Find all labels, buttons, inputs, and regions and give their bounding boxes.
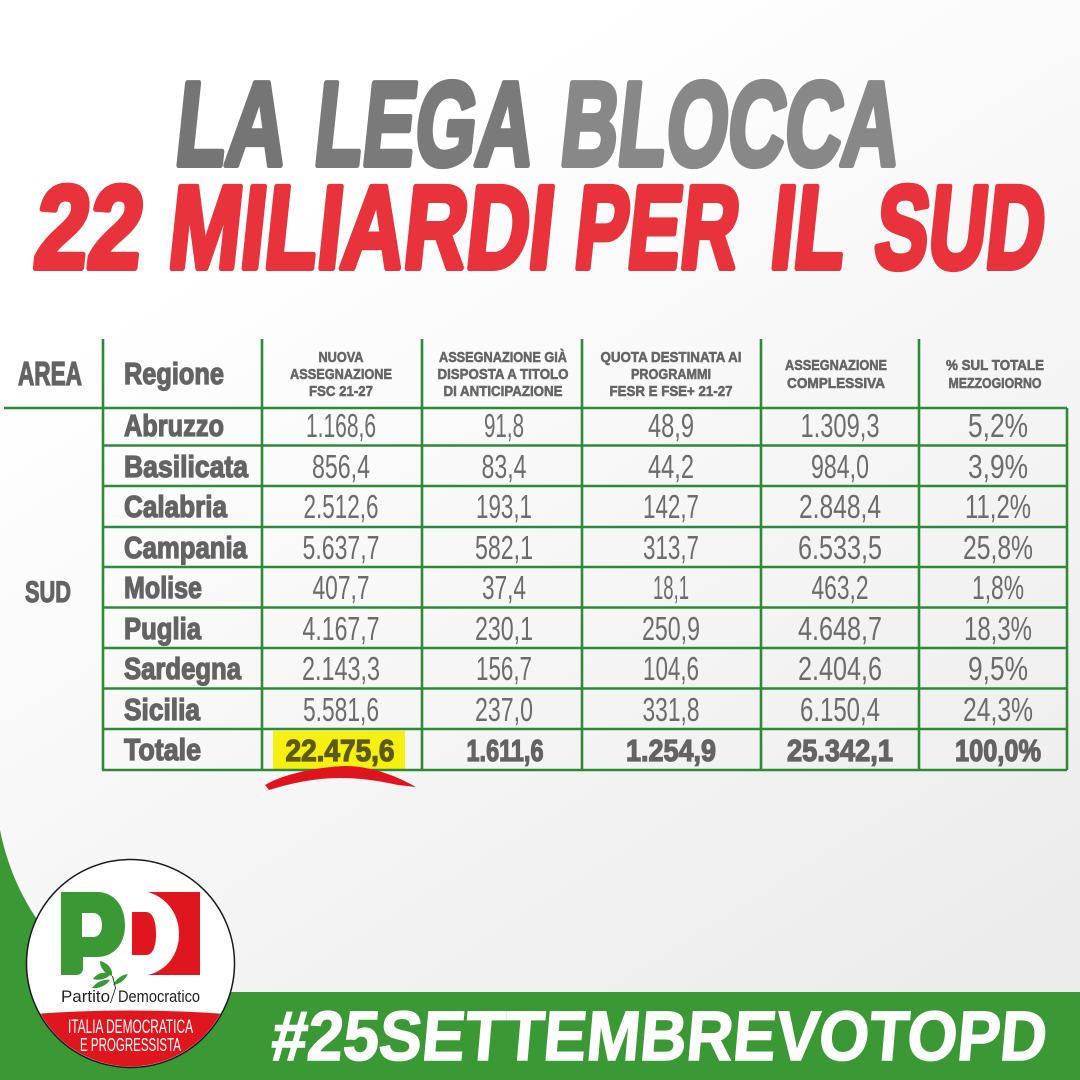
logo: slogan: E PROGRESSISTA: [80, 1035, 181, 1055]
header: regione: Regione: [124, 356, 224, 391]
row: Campania: 5.637,7: [302, 529, 380, 566]
logo: letter D: [132, 892, 200, 975]
row: Campania: 6.533,5: [798, 529, 882, 566]
area label: sud: SUD: [25, 576, 71, 609]
title line 2: PER: [569, 162, 746, 294]
logo circle: [26, 860, 234, 1068]
row: Abruzzo: 91,8: [484, 407, 524, 444]
row: Basilicata: 984,0: [811, 448, 869, 485]
red underline stroke: [265, 766, 416, 790]
header: nuova assegnazione: FSC 21-27: [309, 383, 373, 400]
header: nuova assegnazione: NUOVA: [318, 349, 364, 366]
table: [4, 339, 1067, 770]
row: Abruzzo: [124, 407, 1028, 444]
row: Totale: [124, 732, 1041, 768]
row: Totale: Totale: [124, 732, 201, 767]
row: Molise: 18,1: [653, 569, 689, 606]
highlight: total: [273, 731, 405, 769]
row: Abruzzo: 1.309,3: [800, 407, 880, 444]
logo: slogan: ITALIA DEMOCRATICA: [68, 1017, 193, 1038]
row: Basilicata: [124, 448, 1028, 485]
row: Molise: 407,7: [312, 569, 370, 606]
row: Abruzzo: 5,2%: [968, 407, 1028, 444]
title line 1: [170, 58, 907, 191]
row: Abruzzo: Abruzzo: [124, 408, 224, 443]
row: Sicilia: 24,3%: [963, 691, 1033, 728]
header: assegnazione gia disposta: DISPOSTA A TITOLO: [438, 366, 569, 383]
row: Calabria: Calabria: [124, 489, 228, 524]
row: Totale: 100,0%: [955, 733, 1041, 768]
row: Sicilia: 237,0: [475, 691, 533, 728]
logo: partito democratico text: Partito: [61, 987, 110, 1006]
row: Basilicata: 856,4: [312, 448, 370, 485]
logo: red segment: [40, 1010, 220, 1066]
row: Sicilia: Sicilia: [124, 692, 201, 727]
row: Calabria: [124, 488, 1031, 525]
logo: partito democratico: [20, 860, 240, 1075]
title line 2: [29, 162, 1052, 294]
row: Puglia: 230,1: [475, 610, 533, 647]
header: assegnazione gia disposta: DI ANTICIPAZIONE: [444, 383, 562, 400]
logo: letter P: [61, 892, 125, 975]
header: nuova assegnazione: [290, 349, 392, 400]
header: quota destinata: [600, 349, 742, 400]
row: Abruzzo: 1.168,6: [306, 407, 376, 444]
row: Calabria: 2.512,6: [304, 488, 378, 525]
header: percentuale mezzogiorno: MEZZOGIORNO: [948, 375, 1042, 392]
header: quota destinata: FESR E FSE+ 21-27: [610, 383, 732, 400]
green footer band: [0, 830, 1080, 1080]
row: Sardegna: 2.143,3: [302, 650, 380, 687]
header: assegnazione gia disposta: [438, 349, 569, 400]
title line 2: IL: [765, 162, 853, 294]
title line 1: BLOCCA: [555, 58, 907, 191]
row: Basilicata: Basilicata: [124, 449, 249, 484]
row: Sardegna: [124, 650, 1028, 687]
row: Sicilia: [124, 691, 1033, 728]
header: quota destinata: PROGRAMMI: [631, 366, 711, 383]
row: Totale: 1.611,6: [466, 733, 544, 768]
table grid: [4, 339, 1067, 770]
header: quota destinata: QUOTA DESTINATA AI: [600, 349, 742, 366]
header: percentuale mezzogiorno: [946, 357, 1044, 392]
row: Sicilia: 331,8: [642, 691, 700, 728]
row: Molise: 37,4: [482, 569, 526, 606]
row: Sardegna: 9,5%: [968, 650, 1028, 687]
header: assegnazione complessiva: ASSEGNAZIONE: [785, 357, 887, 374]
row: Calabria: 193,1: [476, 488, 532, 525]
row: Puglia: 4.167,7: [302, 610, 380, 647]
row: Sicilia: 6.150,4: [800, 691, 880, 728]
row: Campania: 313,7: [643, 529, 699, 566]
row: Sardegna: 2.404,6: [798, 650, 882, 687]
row: Sardegna: Sardegna: [124, 651, 242, 686]
header: assegnazione complessiva: [785, 357, 887, 392]
logo: slogan: [68, 1017, 193, 1055]
row: Puglia: 18,3%: [964, 610, 1032, 647]
header: assegnazione gia disposta: ASSEGNAZIONE GIÀ: [439, 349, 567, 366]
row: Molise: 463,2: [812, 569, 868, 606]
row: Campania: Campania: [124, 530, 248, 565]
row: Puglia: [124, 610, 1032, 647]
row: Puglia: 4.648,7: [798, 610, 882, 647]
row: Totale: 1.254,9: [626, 733, 716, 768]
title line 1: LEGA: [309, 58, 541, 191]
row: Abruzzo: 48,9: [648, 407, 694, 444]
logo: partito democratico text: [61, 987, 200, 1006]
row: Campania: 582,1: [475, 529, 533, 566]
row: Sardegna: 156,7: [476, 650, 532, 687]
row: Molise: Molise: [124, 570, 202, 605]
row: Calabria: 2.848,4: [799, 488, 881, 525]
logo: partito democratico text: Democratico: [118, 987, 200, 1006]
header: percentuale mezzogiorno: % SUL TOTALE: [946, 357, 1044, 374]
title line 2: 22: [29, 162, 150, 294]
row: Campania: [124, 529, 1033, 566]
row: Molise: [124, 569, 1024, 606]
header: assegnazione complessiva: COMPLESSIVA: [787, 375, 885, 392]
row: Molise: 1,8%: [972, 569, 1024, 606]
row: Calabria: 11,2%: [965, 488, 1031, 525]
header row: [18, 349, 1044, 400]
title line 1: LA: [170, 58, 294, 191]
row: Basilicata: 83,4: [482, 448, 526, 485]
row: Campania: 25,8%: [963, 529, 1033, 566]
row: Basilicata: 3,9%: [968, 448, 1028, 485]
row: Totale: 22.475,6: [286, 733, 394, 768]
row: Puglia: Puglia: [124, 611, 202, 646]
row: Totale: 25.342,1: [787, 733, 893, 768]
row: Basilicata: 44,2: [648, 448, 694, 485]
row: Puglia: 250,9: [642, 610, 700, 647]
title line 2: MILIARDI: [163, 162, 561, 294]
header: nuova assegnazione: ASSEGNAZIONE: [290, 366, 392, 383]
title: [29, 58, 1052, 294]
logo: olive branch: [92, 961, 128, 1003]
row: Sardegna: 104,6: [643, 650, 699, 687]
row: Sicilia: 5.581,6: [303, 691, 379, 728]
header: area: AREA: [18, 355, 82, 392]
row: Calabria: 142,7: [643, 488, 699, 525]
